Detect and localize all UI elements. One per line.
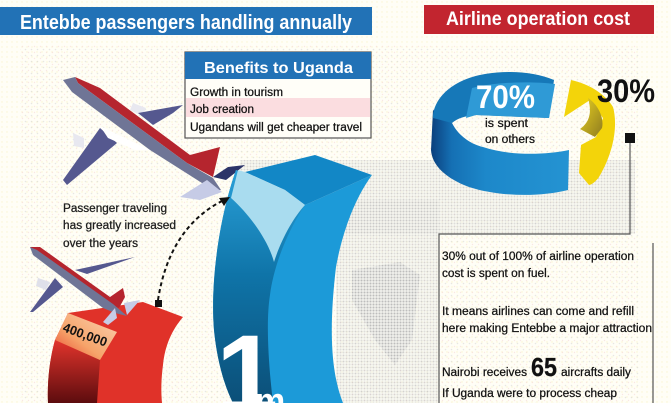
faded background building — [240, 160, 635, 403]
value label: 400,000: 400,000 — [61, 320, 109, 350]
value: 70%: 70% — [476, 79, 535, 115]
value: 30%: 30% — [597, 73, 655, 109]
arrow: growth from 400,000 to 1m — [155, 197, 230, 307]
text: fuel share: 30% out of 100% of airline operation — [442, 251, 634, 263]
bar: 1m passengers blue crescent — [213, 155, 372, 403]
chart: airline operation cost ring — [431, 72, 655, 195]
benefits heading: Benefits to Uganda — [204, 60, 353, 77]
text: refill attraction — [442, 306, 652, 335]
text: fuel share — [442, 251, 634, 280]
benefit row: jobs: Job creation — [190, 104, 254, 116]
panel: benefits to Uganda — [185, 52, 371, 138]
heading: Entebbe passengers handling annually: Entebbe passengers handling annually — [20, 12, 353, 34]
text: refill attraction: here making Entebbe a major attraction — [442, 323, 652, 335]
text: Nairobi comparison: aircrafts daily — [561, 367, 631, 379]
text: Nairobi comparison — [442, 352, 631, 400]
benefit row: tourism: Growth in tourism — [190, 87, 283, 99]
ring segment: 30 percent fuel — [564, 80, 615, 185]
bar: 400,000 passengers red crescent — [48, 302, 183, 403]
callout: fuel explanation box — [439, 133, 653, 403]
benefits heading — [185, 52, 371, 79]
label: is spent on others — [485, 118, 535, 146]
text: refill attraction: It means airlines can come and refill — [442, 306, 634, 318]
benefit row: jobs — [186, 98, 370, 117]
text: fuel share: cost is spent on fuel. — [442, 268, 550, 280]
text: passenger traveling note — [63, 203, 176, 250]
benefit row: cheaper travel: Ugandans will get cheaper travel — [190, 122, 362, 134]
heading: Airline operation cost — [424, 5, 654, 34]
text: passenger traveling note: over the years — [63, 238, 138, 250]
text: passenger traveling note: has greatly increased — [63, 220, 176, 232]
icon: large airplane — [63, 77, 245, 200]
ring segment: 70 percent others — [431, 72, 569, 195]
text: passenger traveling note: Passenger traveling — [63, 203, 167, 215]
icon: small airplane — [30, 247, 140, 325]
heading: Airline operation cost: Airline operation cost — [446, 9, 631, 30]
text: Nairobi comparison: 65 — [531, 352, 557, 382]
text: Nairobi comparison: If Uganda were to process cheap — [442, 388, 617, 400]
text: Nairobi comparison: Nairobi receives — [442, 367, 527, 379]
label: is spent on others: on others — [485, 134, 535, 146]
label: is spent on others: is spent — [485, 118, 529, 130]
